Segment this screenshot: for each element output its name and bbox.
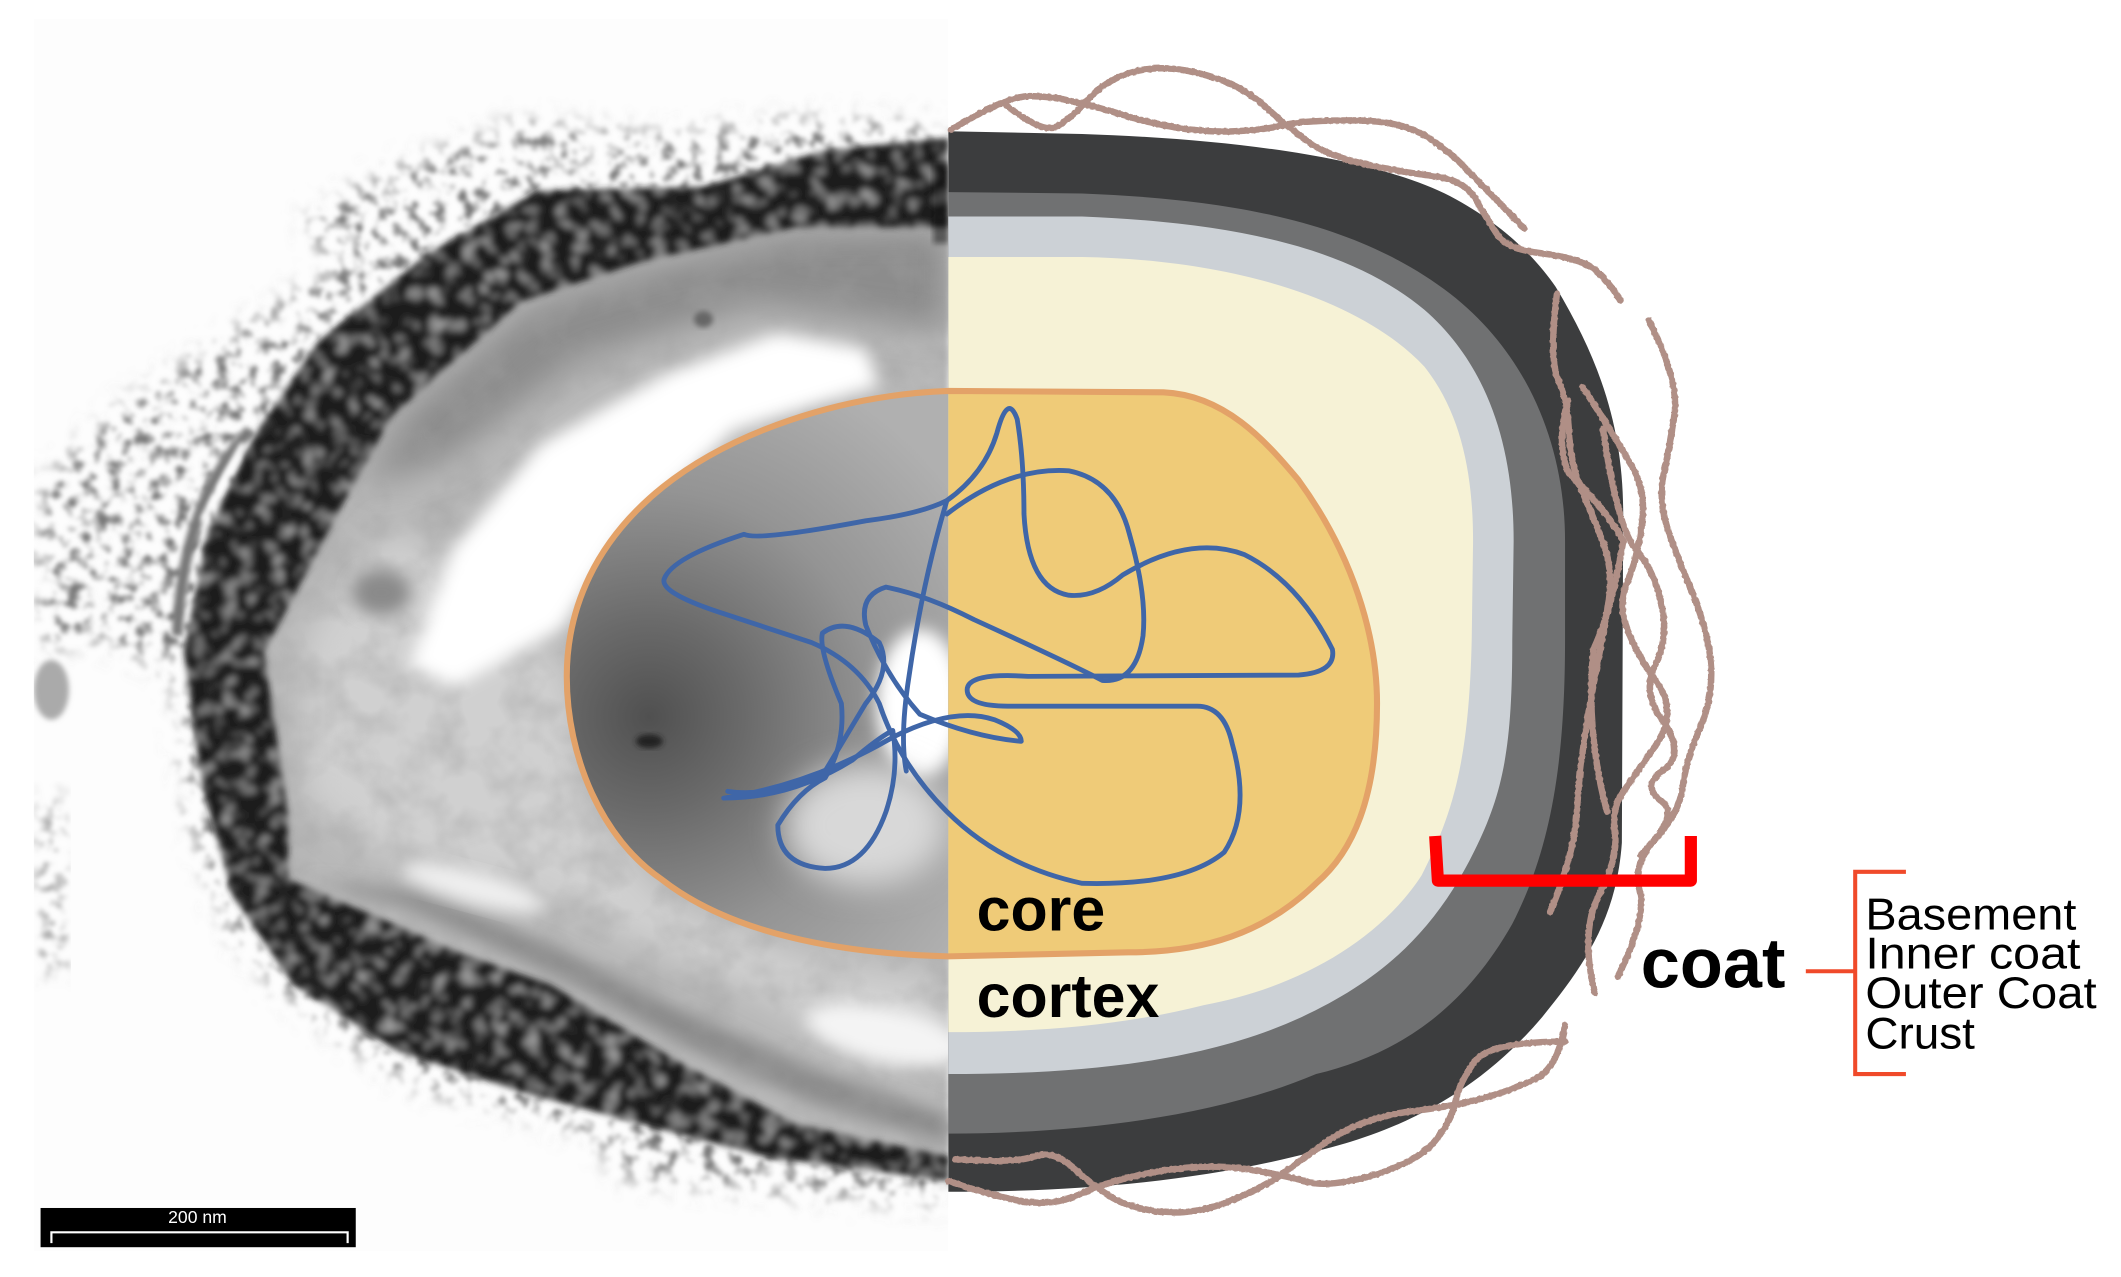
label: cortex: cortex — [977, 962, 1159, 1030]
filaments: exosporium hair — [948, 68, 1711, 1212]
dark speck in cortex — [694, 311, 713, 327]
mottled texture — [274, 318, 948, 1152]
DNA strand — [664, 409, 1333, 884]
core micrograph fill — [567, 391, 948, 956]
coat layer list: Outer Coat — [1865, 969, 2097, 1018]
coat layer bracket — [1806, 872, 1906, 1074]
label: core: core — [977, 876, 1105, 944]
cortex layer — [948, 257, 1473, 1032]
outer coat layer — [948, 192, 1565, 1134]
coat layer list — [1865, 890, 2097, 1058]
crust layer — [948, 131, 1623, 1192]
label: coat: coat — [1641, 923, 1785, 1002]
micrograph: electron microscopy half — [34, 104, 948, 1222]
coat layer list: Inner coat — [1865, 930, 2081, 979]
darker top cortex — [365, 230, 948, 487]
core fill — [948, 391, 1377, 956]
scale bar — [41, 1207, 356, 1247]
light patches — [802, 996, 948, 1075]
fuzzy outer layer — [38, 119, 948, 1204]
red coat bracket — [1435, 836, 1691, 881]
edge darkening on seam — [933, 162, 948, 244]
scale label: 200 nm — [168, 1207, 227, 1227]
coat layer list: Crust — [1865, 1009, 1976, 1058]
blotch at left margin — [34, 660, 69, 720]
lower left fuzz — [37, 798, 68, 974]
interior grey cortex — [257, 216, 948, 1163]
central bright region — [877, 629, 963, 778]
inner arc near left edge — [177, 430, 250, 636]
schematic: spore layers — [948, 131, 1623, 1192]
darker lower cortex shadow — [304, 879, 948, 1143]
white gap band — [410, 333, 879, 687]
dark speck in core — [636, 735, 663, 748]
core outline — [567, 391, 1377, 956]
inner coat layer — [948, 216, 1514, 1074]
light lower cortex — [304, 528, 948, 1062]
coat dark band — [184, 138, 948, 1181]
coat layer list: Basement — [1865, 890, 2077, 939]
